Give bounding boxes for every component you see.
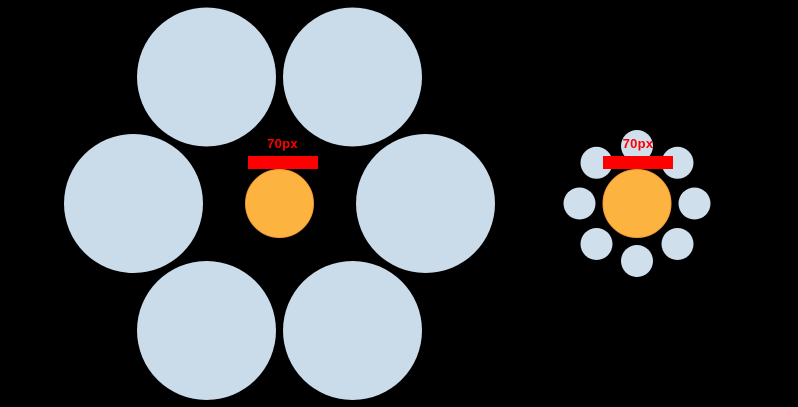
right 70px measurement bar [603, 156, 673, 169]
left cluster: large surrounding circles [64, 8, 495, 400]
right centre orange circle [603, 170, 671, 238]
left 70px label: 70px [267, 136, 298, 151]
left centre orange circle [246, 170, 314, 238]
left 70px measurement bar [248, 156, 318, 169]
right 70px label: 70px [623, 136, 654, 151]
right cluster: small surrounding circles [564, 130, 710, 277]
